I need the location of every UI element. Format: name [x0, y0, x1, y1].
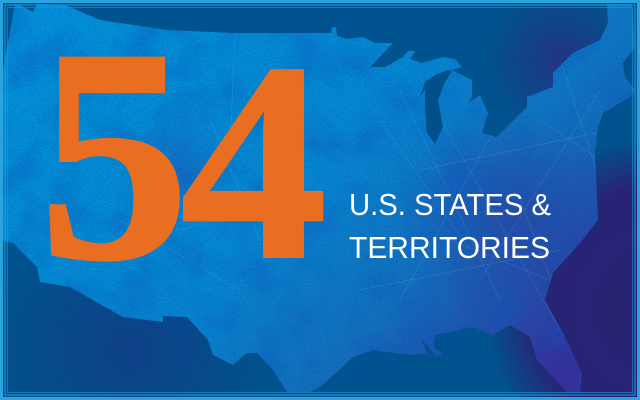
big number 54	[39, 0, 328, 323]
big number 54: 4	[180, 4, 328, 319]
label: U.S. states and territories: TERRITORIES	[349, 230, 550, 265]
lake michigan	[420, 70, 452, 144]
label: U.S. states and territories: U.S. STATES &	[349, 187, 551, 222]
label: U.S. states and territories	[349, 187, 551, 265]
